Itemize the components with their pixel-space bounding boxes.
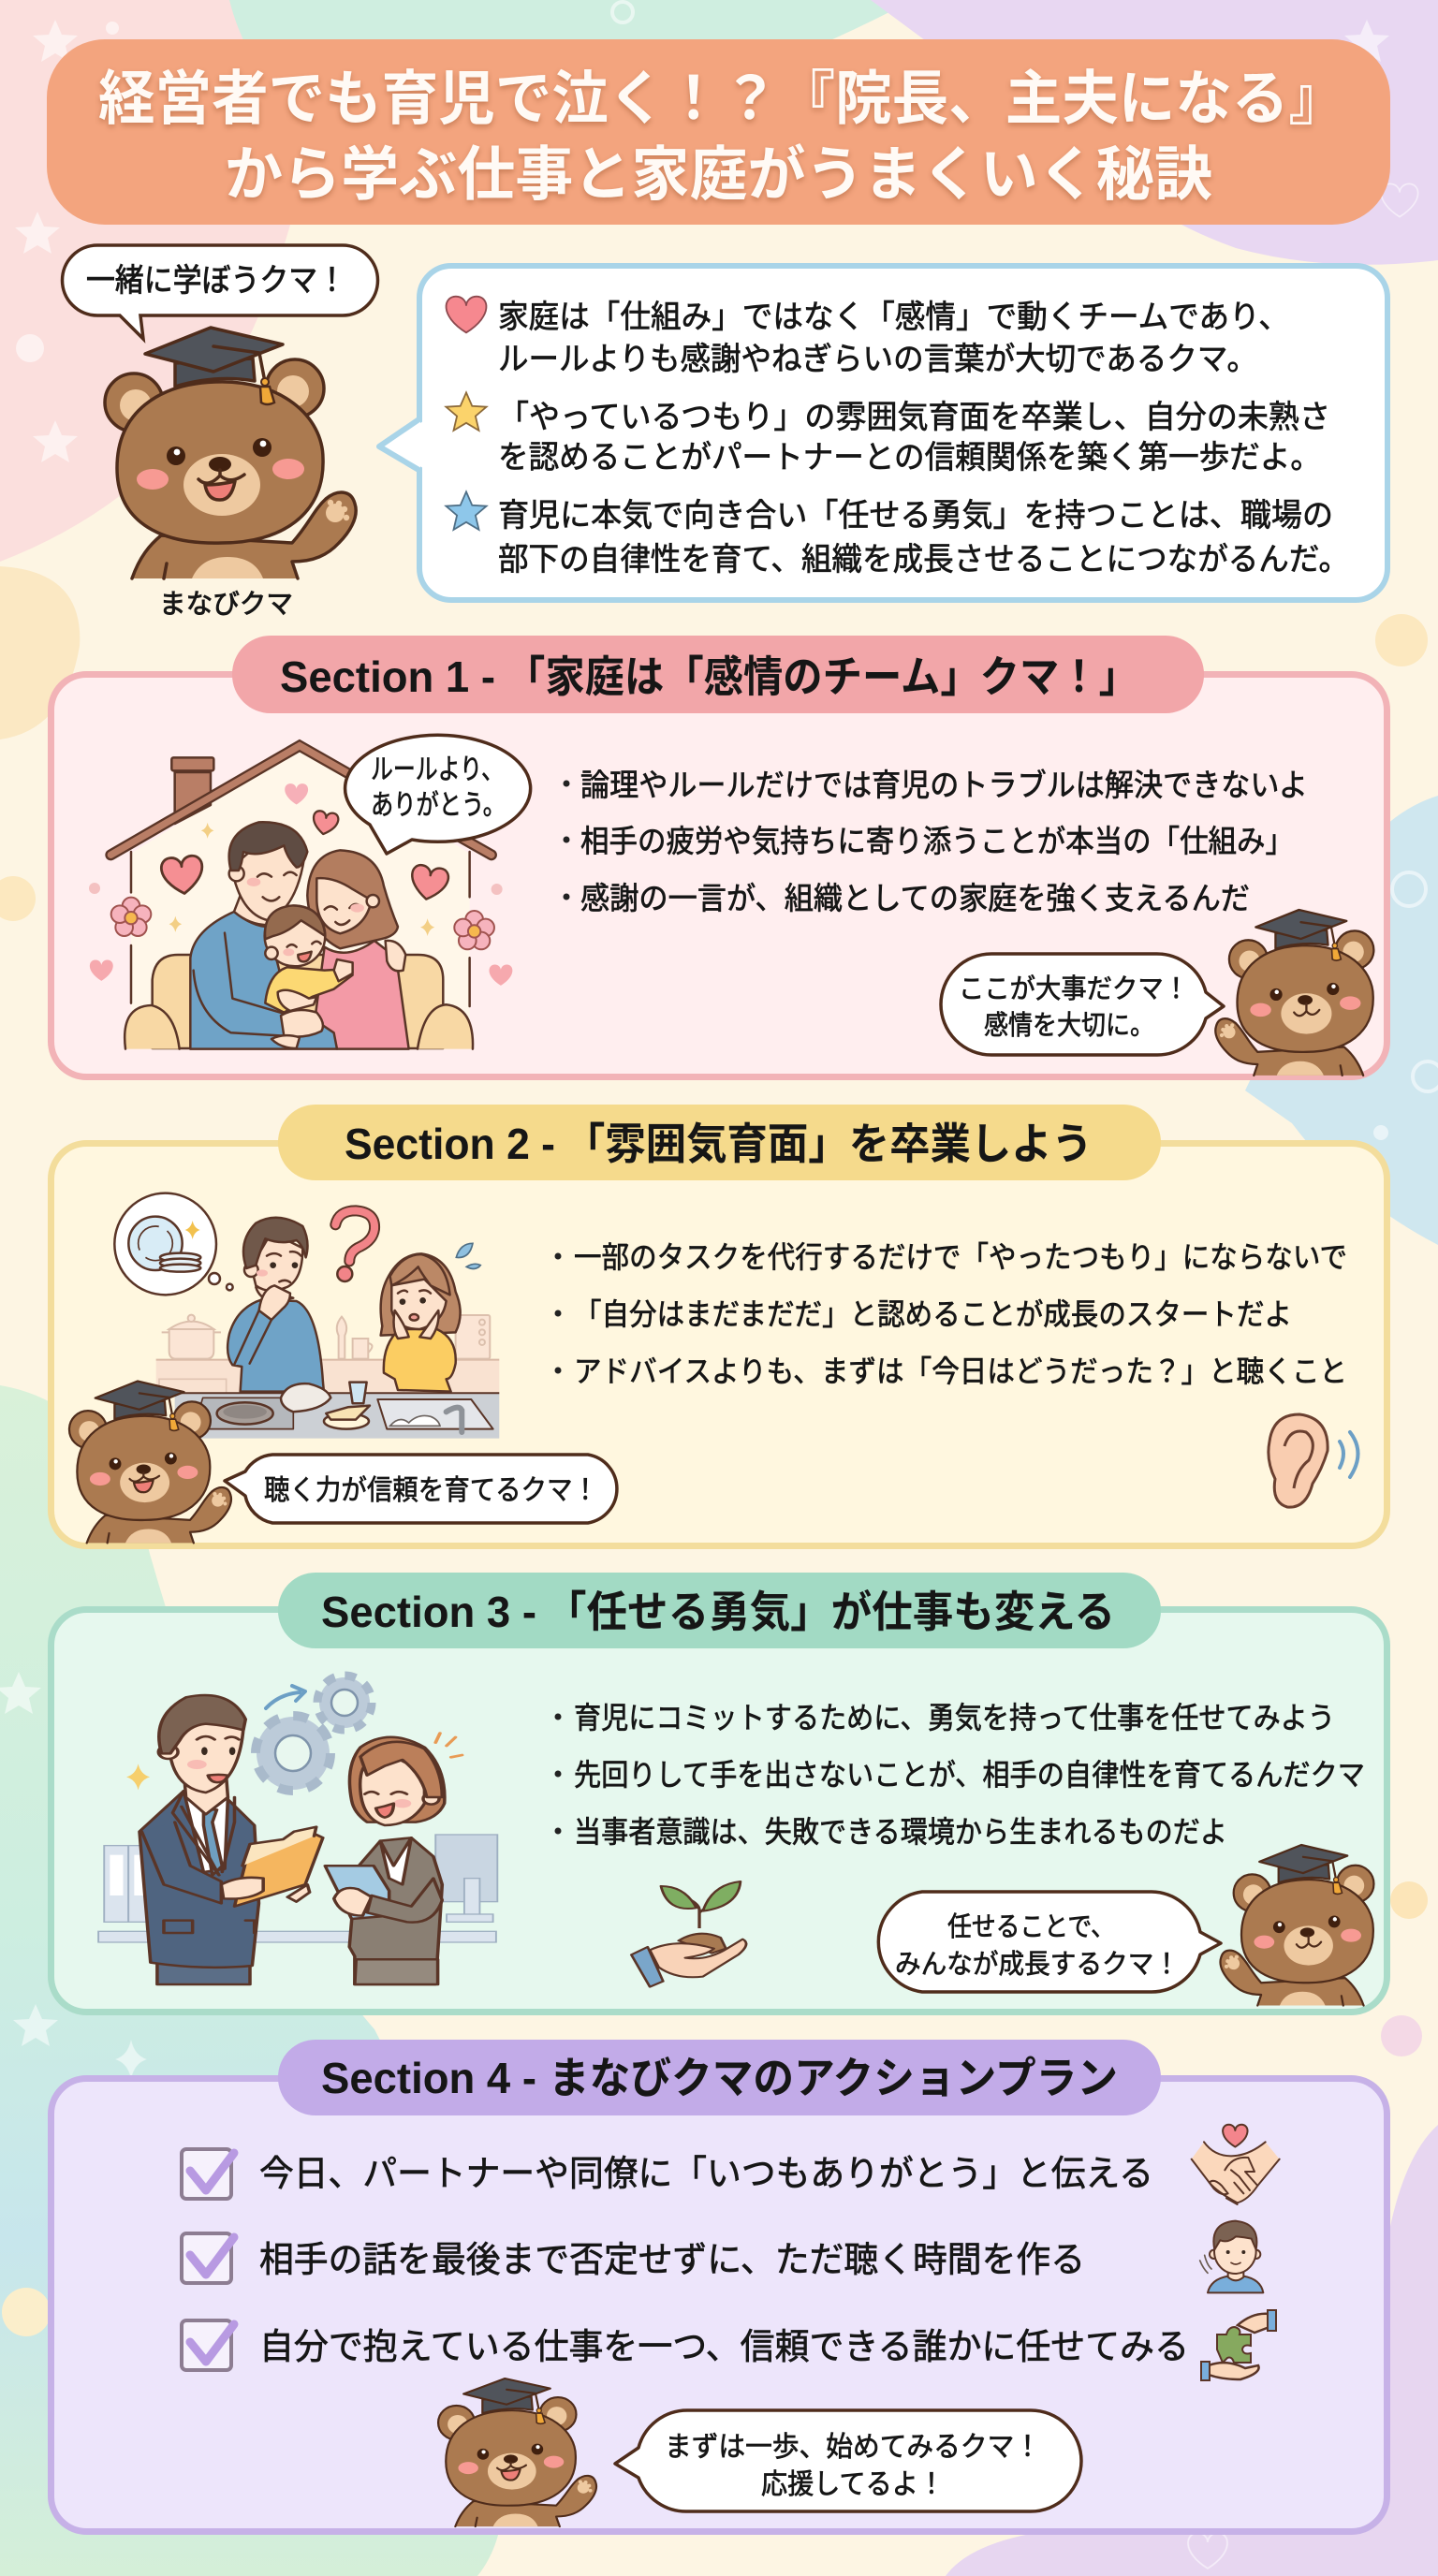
panel: section 2	[51, 1105, 1387, 1546]
speech bubble: listening	[225, 1455, 617, 1523]
title banner: 経営者でも育児で泣く！？『院長、主夫になる』	[98, 66, 1345, 132]
woman	[381, 1253, 461, 1336]
speech bubble: let's learn: 一緒に学ぼうクマ！	[86, 263, 346, 299]
speech bubble: rules vs thanks	[345, 735, 531, 854]
bullet list: section 3: 育児にコミットするために、勇気を持って仕事を任せてみよう	[574, 1701, 1335, 1734]
heading: section 1	[232, 636, 1204, 713]
thought bubble	[114, 1193, 216, 1295]
mascot: section 2 bear	[69, 1382, 231, 1543]
icon: blue star	[446, 491, 487, 530]
mascot: section 4 bear	[438, 2378, 596, 2526]
heading: section 4: まなびクマのアクションプラン	[549, 2054, 1118, 2102]
bullet list: section 3: 先回りして手を出さないことが、相手の自律性を育てるんだクマ	[574, 1758, 1365, 1792]
summary text: ルールよりも感謝やねぎらいの言葉が大切であるクマ。	[498, 342, 1257, 377]
sweat	[456, 1243, 473, 1257]
summary text	[498, 300, 1349, 578]
icon: listening person	[1200, 2221, 1263, 2292]
heading: section 2: 「雰囲気育面」を卒業しよう	[565, 1120, 1093, 1168]
heading: section 2: Section 2 -	[345, 1120, 555, 1168]
panel: section 1	[51, 636, 1387, 1076]
heading: section 2	[278, 1105, 1161, 1180]
speech bubble: section 1 bear	[941, 954, 1224, 1055]
panel: section 3	[51, 1573, 1387, 2012]
mascot name: まなびクマ	[159, 590, 293, 620]
summary text: 家庭は「仕組み」ではなく「感情」で動くチームであり、	[498, 300, 1289, 335]
icon: yellow star	[446, 392, 487, 431]
heading: section 4	[278, 2040, 1161, 2115]
illustration: kitchen couple	[114, 1193, 499, 1439]
panel: summary	[379, 266, 1387, 600]
heading: section 1: 「家庭は「感情のチーム」クマ！」	[506, 652, 1138, 701]
flower left	[111, 898, 151, 936]
man suit	[157, 1959, 250, 1984]
woman suit	[349, 1837, 442, 1984]
mascot: section 1 bear	[1215, 910, 1373, 1076]
speech bubble: let's learn	[62, 245, 378, 339]
summary text: を認めることがパートナーとの信頼関係を築く第一歩だよ。	[498, 440, 1321, 476]
counter	[175, 1393, 499, 1439]
speech bubble: section 1 bear: ここが大事だクマ！	[959, 973, 1189, 1004]
icon: heart	[447, 297, 486, 332]
title banner: から学ぶ仕事と家庭がうまくいく秘訣	[225, 142, 1212, 208]
bullet list: section 2: 一部のタスクを代行するだけで「やったつもり」にならないで	[574, 1240, 1347, 1274]
bullet list: section 2: アドバイスよりも、まずは「今日はどうだった？」と聴くこと	[574, 1354, 1347, 1388]
illustration: family in house	[89, 746, 512, 1049]
flower right	[454, 911, 494, 949]
heading: section 4: Section 4 -	[321, 2054, 536, 2102]
speech bubble: section 3 bear: みんなが成長するクマ！	[895, 1949, 1180, 1980]
bullet list: section 2: 「自分はまだまだだ」と認めることが成長のスタートだよ	[574, 1297, 1292, 1331]
icon: gears and arrow	[256, 1676, 372, 1791]
summary text: 育児に本気で向き合い「任せる勇気」を持つことは、職場の	[498, 498, 1333, 534]
man	[227, 1299, 324, 1392]
question mark	[335, 1210, 374, 1261]
heading: section 1: Section 1 -	[280, 652, 495, 701]
summary text: 「やっているつもり」の雰囲気育面を卒業し、自分の未熟さ	[498, 400, 1330, 435]
speech bubble: section 3 bear: 任せることで、	[947, 1911, 1115, 1942]
action item 3: 自分で抱えている仕事を一つ、信頼できる誰かに任せてみる	[259, 2328, 1189, 2367]
bullet list: section 1: 論理やルールだけでは育児のトラブルは解決できないよ	[580, 768, 1308, 802]
summary text: 部下の自律性を育て、組織を成長させることにつながるんだ。	[498, 542, 1349, 578]
bullet list: section 3: 当事者意識は、失敗できる環境から生まれるものだよ	[574, 1815, 1227, 1849]
speech bubble: section 3 bear	[878, 1892, 1221, 1992]
icon: plant in hand	[631, 1881, 746, 1987]
mascot: section 3 bear	[1220, 1845, 1373, 2006]
title banner	[47, 39, 1390, 225]
bullet list: section 1: 相手の疲労や気持ちに寄り添うことが本当の「仕組み」	[580, 824, 1294, 858]
icon: handshake with heart	[1192, 2125, 1280, 2204]
panel: section 4	[51, 2040, 1387, 2531]
action item 2: 相手の話を最後まで否定せずに、ただ聴く時間を作る	[259, 2241, 1085, 2280]
speech bubble: encouragement: まずは一歩、始めてみるクマ！	[665, 2432, 1041, 2463]
speech bubble: encouragement: 応援してるよ！	[761, 2469, 945, 2500]
heading: section 3: Section 3 -	[321, 1588, 536, 1636]
bullet list: section 2	[554, 1240, 1347, 1388]
bullet list: section 3	[554, 1701, 1365, 1849]
bullet list: section 1	[564, 768, 1308, 915]
icon: ear	[1269, 1414, 1357, 1507]
heading: section 3: 「任せる勇気」が仕事も変える	[546, 1588, 1115, 1636]
speech bubble: encouragement	[615, 2410, 1081, 2511]
speech bubble: listening: 聴く力が信頼を育てるクマ！	[264, 1475, 598, 1506]
bullet list: section 1: 感謝の一言が、組織としての家庭を強く支えるんだ	[580, 881, 1250, 915]
speech bubble: section 1 bear: 感情を大切に。	[984, 1010, 1154, 1041]
heading: section 3	[278, 1573, 1161, 1648]
icon: handing over puzzle	[1201, 2310, 1276, 2380]
mascot: manabi bear	[105, 328, 356, 578]
speech bubble: rules vs thanks: ルールより、	[371, 754, 504, 785]
illustration: delegating at office	[98, 1695, 497, 1984]
action item 1: 今日、パートナーや同僚に「いつもありがとう」と伝える	[259, 2155, 1153, 2194]
speech bubble: rules vs thanks: ありがとう。	[371, 790, 506, 821]
